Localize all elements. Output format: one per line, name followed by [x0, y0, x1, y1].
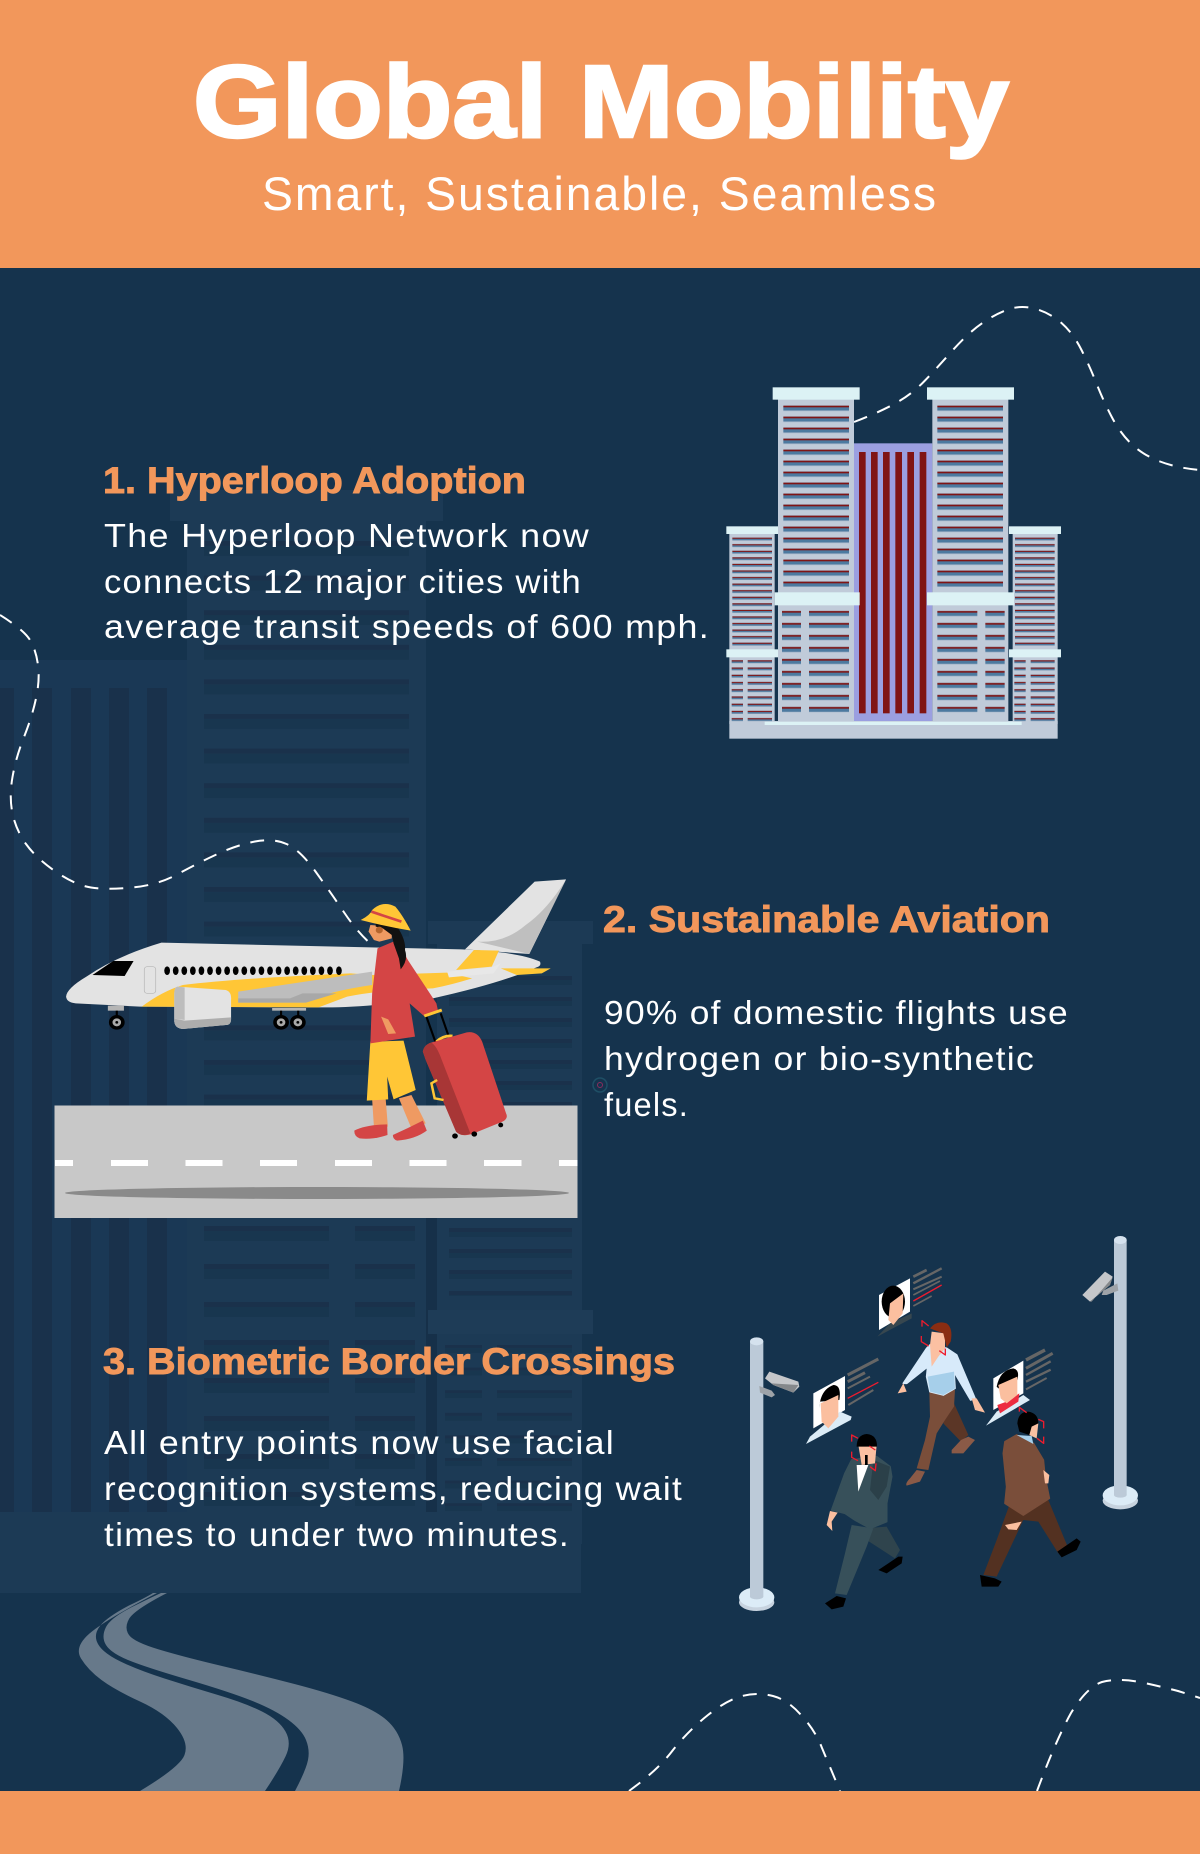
body 2: hydrogen or bio-synthetic [604, 1040, 1035, 1077]
face card: right [986, 1350, 1053, 1426]
body 2 [604, 994, 1069, 1123]
illustration: winding road [79, 1593, 403, 1791]
footer band [0, 1791, 1200, 1854]
subtitle: Smart, Sustainable, Seamless [262, 167, 938, 220]
header band [0, 0, 1200, 268]
illustration: biometric border crossing [739, 1236, 1138, 1611]
right pole with camera [1082, 1236, 1138, 1509]
walker: man in dark suit [825, 1434, 903, 1609]
dashed route: bottom right [1037, 1680, 1200, 1791]
background city skyline [0, 490, 593, 1593]
section 3: biometric text [103, 1341, 683, 1553]
dashed route: left [0, 615, 372, 945]
face card: left [806, 1359, 878, 1444]
face card: top [877, 1268, 942, 1337]
runway [54, 1106, 578, 1218]
walker: man in brown suit [980, 1407, 1081, 1587]
body 1: connects 12 major cities with [104, 563, 582, 600]
body 1 [104, 517, 710, 645]
illustration: airplane [66, 879, 566, 1030]
heading 2: 2. Sustainable Aviation [603, 899, 1050, 940]
section 1: hyperloop text [103, 460, 710, 645]
body 3 [104, 1424, 683, 1553]
section 2: sustainable aviation text [603, 899, 1069, 1123]
heading 3: 3. Biometric Border Crossings [103, 1341, 675, 1382]
dashed route: top right [854, 307, 1200, 470]
body 3: All entry points now use facial [104, 1424, 615, 1461]
illustration: traveller with suitcase [354, 904, 507, 1141]
dashed route: bottom centre [629, 1694, 840, 1791]
body 1: The Hyperloop Network now [104, 517, 590, 554]
body 3: times to under two minutes. [104, 1516, 570, 1553]
body 2: 90% of domestic flights use [604, 994, 1069, 1031]
icon: small ring marker [593, 1078, 607, 1092]
body 1: average transit speeds of 600 mph. [104, 608, 710, 645]
icon: skyscraper building [726, 387, 1061, 739]
left pole with camera [739, 1337, 799, 1611]
heading 1: 1. Hyperloop Adoption [103, 460, 526, 501]
body 2: fuels. [604, 1086, 689, 1123]
body 3: recognition systems, reducing wait [104, 1470, 683, 1507]
walker: woman in blouse [898, 1321, 985, 1486]
title: Global Mobility [193, 44, 1009, 159]
